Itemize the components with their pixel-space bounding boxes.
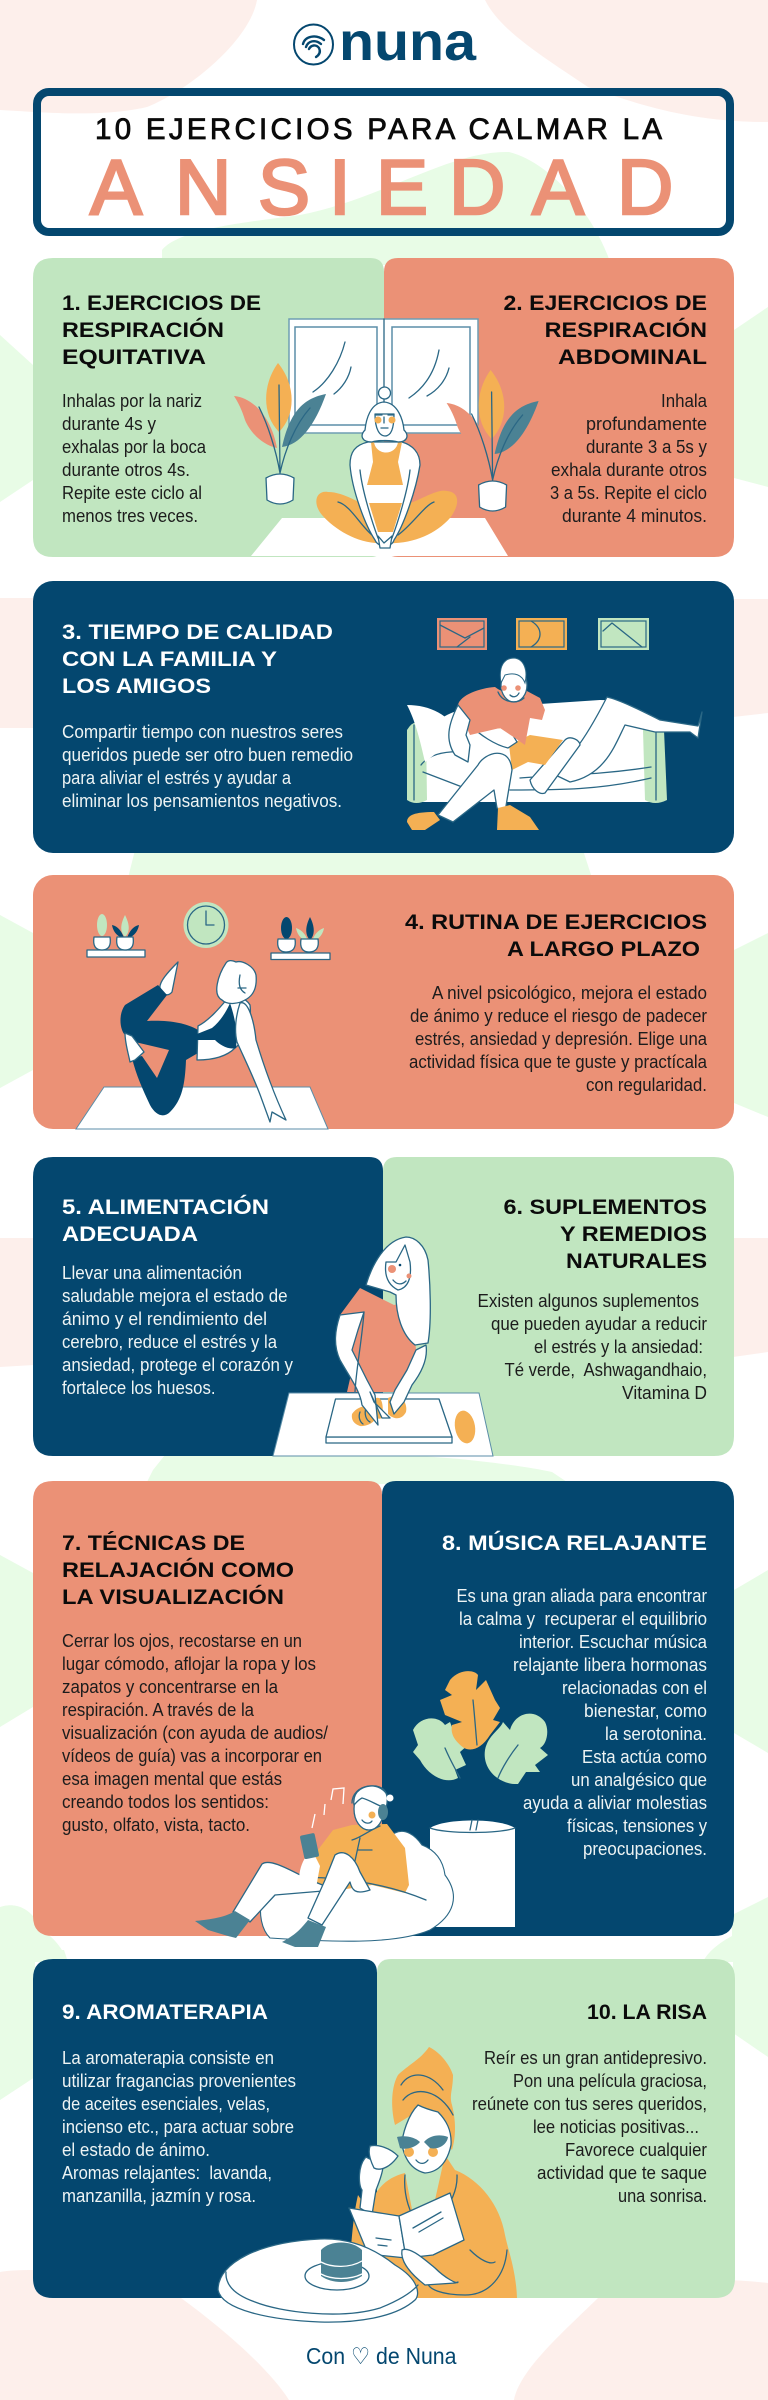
body 8: físicas, tensiones y — [567, 1815, 708, 1836]
body 1: exhalas por la boca — [62, 436, 207, 457]
mat — [251, 518, 508, 556]
heading 2: RESPIRACIÓN — [545, 317, 707, 342]
illustration: woman cooking — [273, 1237, 493, 1456]
body 5: saludable mejora el estado de — [62, 1285, 288, 1306]
sofa — [407, 700, 667, 803]
body 5: Llevar una alimentación — [62, 1262, 242, 1283]
heading 7: LA VISUALIZACIÓN — [62, 1584, 284, 1609]
heading 3: LOS AMIGOS — [62, 674, 211, 698]
body 7: visualización (con ayuda de audios/ — [62, 1722, 329, 1743]
body 6: Existen algunos suplementos — [478, 1290, 699, 1311]
table — [218, 2239, 418, 2322]
body 10: Favorece cualquier — [565, 2139, 707, 2160]
body 2: 3 a 5s. Repite el ciclo — [550, 482, 707, 503]
heading 1 — [62, 291, 261, 369]
sunglasses — [397, 2135, 448, 2149]
body 3: para aliviar el estrés y ayudar a — [62, 767, 292, 788]
illustration: leaves and man with headphones — [195, 1671, 548, 1947]
body 5: ansiedad, protege el corazón y — [62, 1354, 294, 1375]
body 3: eliminar los pensamientos negativos. — [62, 790, 342, 811]
heading 2: 2. EJERCICIOS DE — [504, 291, 707, 315]
body 8: preocupaciones. — [583, 1838, 707, 1859]
heading 3: 3. TIEMPO DE CALIDAD — [62, 620, 333, 644]
body 4: A nivel psicológico, mejora el estado — [432, 982, 707, 1003]
heading 1: EQUITATIVA — [62, 345, 206, 369]
heading 6 — [504, 1195, 707, 1273]
icon: logo circle — [294, 24, 333, 64]
body 7 — [62, 1630, 329, 1835]
body 9: La aromaterapia consiste en — [62, 2047, 274, 2068]
woman lying — [470, 697, 702, 793]
body 8: Es una gran aliada para encontrar — [456, 1585, 707, 1606]
body 6 — [478, 1290, 707, 1403]
body 8: relacionadas con el — [562, 1677, 707, 1698]
body 5 — [62, 1262, 294, 1398]
heading 6: Y REMEDIOS — [560, 1222, 707, 1246]
body 1: durante 4s y — [62, 413, 157, 434]
shelf right — [271, 917, 330, 960]
panel 10: la risa — [377, 1959, 735, 2298]
body 7: zapatos y concentrarse en la — [62, 1676, 279, 1697]
heading 7: 7. TÉCNICAS DE — [62, 1530, 245, 1555]
heading 7: RELAJACIÓN COMO — [62, 1557, 294, 1582]
panel 5: alimentación adecuada — [33, 1157, 383, 1456]
body 2 — [550, 390, 708, 526]
beanbag — [260, 1831, 453, 1941]
menu — [349, 2208, 406, 2258]
mat — [76, 1087, 328, 1129]
heading 8: 8. MÚSICA RELAJANTE — [442, 1530, 707, 1555]
body 10: Pon una película graciosa, — [513, 2070, 707, 2091]
woman — [335, 1237, 430, 1425]
body 7: Cerrar los ojos, recostarse en un — [62, 1630, 302, 1651]
body 3: Compartir tiempo con nuestros seres — [62, 721, 343, 742]
body 1: Inhalas por la nariz — [62, 390, 202, 411]
heading 5: 5. ALIMENTACIÓN — [62, 1194, 269, 1219]
body 10: una sonrisa. — [618, 2185, 707, 2206]
panel 8: música relajante — [382, 1481, 734, 1936]
body 8: interior. Escuchar música — [519, 1631, 708, 1652]
towel — [392, 2047, 455, 2150]
body 3: queridos puede ser otro buen remedio — [62, 744, 353, 765]
music notes — [312, 1788, 344, 1828]
face — [402, 2105, 451, 2173]
body 1 — [62, 390, 207, 526]
body 6: Vitamina D — [622, 1382, 707, 1403]
panel 7: técnicas de relajación — [33, 1481, 382, 1936]
cutting board — [326, 1396, 478, 1445]
body 5: ánimo y el rendimiento del — [62, 1308, 267, 1329]
panel 4: rutina de ejercicios — [33, 875, 734, 1129]
illustration: yoga pose with shelves — [76, 902, 330, 1129]
body 2: profundamente — [586, 413, 707, 434]
panel 3: tiempo de calidad — [33, 581, 734, 853]
body 7: vídeos de guía) vas a incorporar en — [62, 1745, 322, 1766]
body 4: actividad física que te guste y practícala — [409, 1051, 708, 1072]
body 10: lee noticias positivas... — [533, 2116, 699, 2137]
hand — [402, 2249, 458, 2285]
man — [195, 1786, 426, 1947]
heading 6: 6. SUPLEMENTOS — [504, 1195, 707, 1219]
heading 6: NATURALES — [566, 1249, 707, 1273]
body 2: durante 3 a 5s y — [586, 436, 708, 457]
body 9: manzanilla, jazmín y rosa. — [62, 2185, 256, 2206]
illustration: woman meditating by window — [234, 319, 539, 556]
heading 1: 1. EJERCICIOS DE — [62, 291, 261, 315]
shelf left — [87, 914, 145, 957]
body 7: respiración. A través de la — [62, 1699, 255, 1720]
body 2: Inhala — [661, 390, 708, 411]
body 10: Reír es un gran antidepresivo. — [484, 2047, 707, 2068]
clock — [184, 902, 228, 948]
plant right — [447, 370, 539, 511]
body 9: el estado de ánimo. — [62, 2139, 210, 2160]
heading 2 — [504, 291, 707, 369]
title line 1: 10 EJERCICIOS PARA CALMAR LA — [95, 113, 662, 146]
body 8: Esta actúa como — [582, 1746, 707, 1767]
body 4: estrés, ansiedad y depresión. Elige una — [415, 1028, 708, 1049]
plant left — [234, 363, 326, 504]
table — [273, 1393, 493, 1456]
leaves — [413, 1671, 548, 1784]
heading 9: 9. AROMATERAPIA — [62, 2000, 268, 2024]
heading 3 — [62, 620, 333, 698]
title box — [37, 92, 730, 232]
body 2: durante 4 minutos. — [562, 505, 707, 526]
yoga figure — [120, 961, 286, 1122]
bathrobe — [348, 2155, 517, 2298]
heading 3: CON LA FAMILIA Y — [62, 647, 277, 671]
plate — [305, 2262, 369, 2290]
body 8: relajante libera hormonas — [513, 1654, 707, 1675]
arm and cup — [359, 2157, 383, 2215]
body 8: la serotonina. — [605, 1723, 707, 1744]
heading 10: 10. LA RISA — [587, 2000, 707, 2024]
body 5: fortalece los huesos. — [62, 1377, 216, 1398]
body 8: bienestar, como — [584, 1700, 707, 1721]
body 6: Té verde, Ashwagandhaio, — [504, 1359, 707, 1380]
cake — [321, 2242, 362, 2282]
illustration: couple on sofa — [407, 618, 702, 830]
body 9: de aceites esenciales, velas, — [62, 2093, 270, 2114]
body 7: lugar cómodo, aflojar la ropa y los — [62, 1653, 316, 1674]
body 8: un analgésico que — [571, 1769, 707, 1790]
body 7: esa imagen mental que estás — [62, 1768, 282, 1789]
body 4: con regularidad. — [586, 1074, 707, 1095]
heading 4: 4. RUTINA DE EJERCICIOS — [405, 910, 707, 934]
illustration: woman with towel reading — [218, 2047, 517, 2322]
body 6: que pueden ayudar a reducir — [491, 1313, 707, 1334]
heading 4: A LARGO PLAZO — [507, 937, 700, 961]
body 7: creando todos los sentidos: — [62, 1791, 269, 1812]
body 8: ayuda a aliviar molestias — [523, 1792, 707, 1813]
panel 1: respiración equitativa — [33, 258, 384, 557]
body 8: la calma y recuperar el equilibrio — [459, 1608, 707, 1629]
body 1: durante otros 4s. — [62, 459, 190, 480]
logo: nuna — [294, 12, 477, 72]
panel 6: suplementos — [383, 1157, 734, 1456]
body 8 — [456, 1585, 708, 1859]
body 2: exhala durante otros — [551, 459, 707, 480]
heading 2: ABDOMINAL — [558, 345, 707, 369]
body 1: Repite este ciclo al — [62, 482, 202, 503]
footer: Con amor de Nuna: Con ♡ de Nuna — [306, 2343, 457, 2369]
man sitting — [407, 658, 545, 830]
body 5: cerebro, reduce el estrés y la — [62, 1331, 278, 1352]
panel 2: respiración abdominal — [384, 258, 734, 557]
body 9: Aromas relajantes: lavanda, — [62, 2162, 272, 2183]
body 9 — [62, 2047, 296, 2206]
window — [289, 319, 478, 440]
heading 5 — [62, 1194, 269, 1246]
panel 9: aromaterapia — [33, 1959, 377, 2298]
logo wordmark: nuna — [339, 12, 477, 72]
body 10: actividad que te saque — [537, 2162, 707, 2183]
body 10 — [472, 2047, 707, 2206]
body 9: incienso etc., para actuar sobre — [62, 2116, 294, 2137]
pouf — [430, 1820, 515, 1927]
meditating woman — [316, 387, 457, 548]
body 9: utilizar fragancias provenientes — [62, 2070, 296, 2091]
heading 7 — [62, 1530, 294, 1609]
heading 4 — [405, 910, 707, 961]
body 4: de ánimo y reduce el riesgo de padecer — [410, 1005, 707, 1026]
body 1: menos tres veces. — [62, 505, 198, 526]
heading 5: ADECUADA — [62, 1222, 198, 1246]
body 7: gusto, olfato, vista, tacto. — [62, 1814, 250, 1835]
title line 2: ANSIEDAD: ANSIEDAD — [90, 143, 673, 231]
body 10: reúnete con tus seres queridos, — [472, 2093, 707, 2114]
body 6: el estrés y la ansiedad: — [534, 1336, 703, 1357]
heading 1: RESPIRACIÓN — [62, 317, 224, 342]
wall pictures — [437, 618, 649, 650]
body 4 — [409, 982, 708, 1095]
body 3 — [62, 721, 353, 811]
